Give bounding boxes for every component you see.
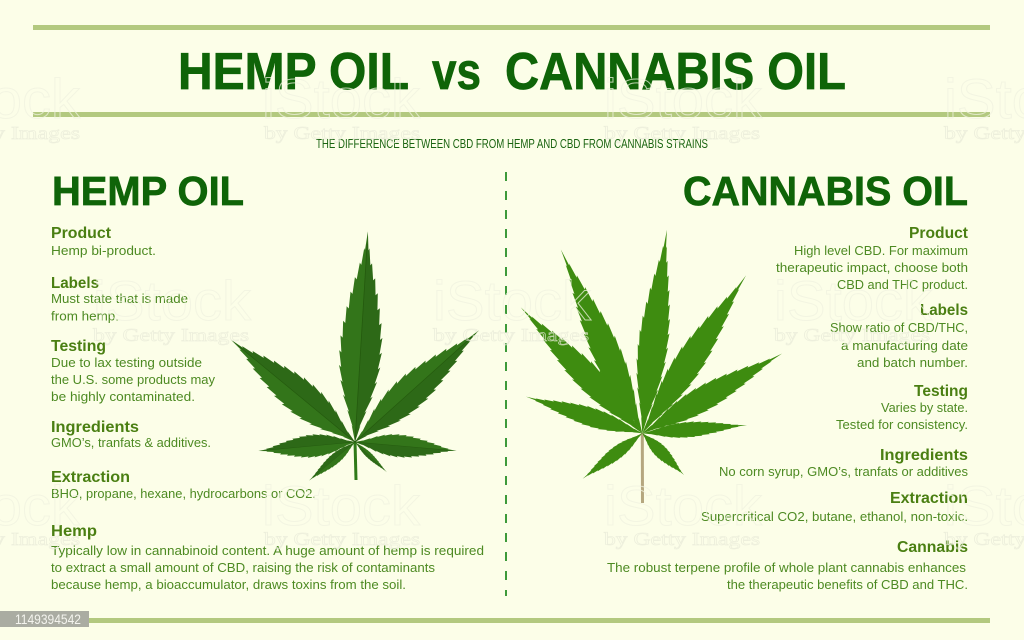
watermark overlay: by Getty Images: [264, 529, 420, 549]
hemp testing: be highly contaminated.: [51, 389, 195, 404]
cannabis ingredients: No corn syrup, GMO’s, tranfats or additives: [719, 464, 968, 479]
cannabis ingredients: [719, 447, 968, 479]
title: vs: [432, 43, 481, 101]
hemp summary: [51, 523, 484, 592]
hemp summary: to extract a small amount of CBD, raising the risk of contaminants: [51, 560, 435, 575]
cannabis labels: Show ratio of CBD/THC,: [830, 320, 968, 335]
hemp labels: Must state that is made: [51, 291, 188, 306]
hemp testing: [51, 338, 215, 404]
title: [178, 43, 846, 101]
watermark overlay: by Getty Images: [604, 529, 760, 549]
cannabis product: therapeutic impact, choose both: [776, 260, 968, 275]
cannabis testing: Testing: [914, 383, 968, 400]
cannabis labels: a manufacturing date: [841, 338, 968, 353]
cannabis product: [776, 225, 969, 292]
cannabis extraction: Supercritical CO2, butane, ethanol, non-toxic.: [701, 509, 968, 524]
icon: cannabis leaf: [511, 228, 788, 503]
cannabis summary: [607, 539, 968, 592]
title: CANNABIS OIL: [505, 43, 846, 101]
hemp testing: the U.S. some products may: [51, 372, 215, 387]
hemp extraction: [51, 469, 316, 501]
cannabis extraction: Extraction: [890, 490, 968, 507]
watermark overlay: by Getty Images: [264, 123, 420, 143]
hemp labels: Labels: [51, 275, 99, 292]
icon: hemp leaf: [220, 230, 491, 485]
watermark overlay: iStock: [604, 474, 763, 537]
title: HEMP OIL: [178, 43, 409, 101]
watermark overlay: iStock: [262, 474, 421, 537]
bottom rule: [33, 618, 990, 623]
watermark overlay: [0, 67, 1024, 549]
hemp summary: because hemp, a bioaccumulator, draws toxins from the soil.: [51, 577, 406, 592]
watermark overlay: by Getty Images: [774, 325, 930, 345]
watermark overlay: by Getty Images: [93, 325, 249, 345]
hemp extraction: BHO, propane, hexane, hydrocarbons or CO2.: [51, 486, 316, 501]
cannabis extraction: [701, 490, 968, 524]
hemp testing: Due to lax testing outside: [51, 355, 202, 370]
title underline rule: [33, 112, 990, 117]
cannabis summary: the therapeutic benefits of CBD and THC.: [727, 577, 968, 592]
image id tag: 1149394542: [15, 612, 81, 627]
subtitle: THE DIFFERENCE BETWEEN CBD FROM HEMP AND CBD FROM CANNABIS STRAINS: [316, 136, 708, 151]
watermark overlay: iStock: [604, 67, 763, 130]
cannabis summary: The robust terpene profile of whole plant cannabis enhances: [607, 560, 967, 575]
hemp product: Hemp bi-product.: [51, 243, 156, 258]
hemp ingredients: GMO’s, tranfats & additives.: [51, 435, 211, 450]
hemp summary: Hemp: [51, 523, 97, 540]
heading: hemp oil: HEMP OIL: [52, 168, 244, 214]
watermark overlay: by Getty Images: [433, 325, 589, 345]
panel: cannabis oil: [607, 168, 969, 592]
cannabis testing: Tested for consistency.: [836, 417, 968, 432]
watermark overlay: iStock: [774, 269, 933, 332]
top rule: [33, 25, 990, 30]
hemp summary: Typically low in cannabinoid content. A huge amount of hemp is required: [51, 543, 484, 558]
cannabis product: Product: [909, 225, 969, 242]
watermark overlay: by Getty Images: [604, 123, 760, 143]
cannabis labels: and batch number.: [857, 355, 968, 370]
hemp testing: Testing: [51, 338, 106, 355]
hemp product: Product: [51, 225, 112, 242]
cannabis ingredients: Ingredients: [880, 447, 968, 464]
hemp labels: [51, 275, 188, 324]
hemp extraction: Extraction: [51, 469, 130, 486]
hemp labels: from hemp.: [51, 308, 119, 324]
watermark overlay: iStock: [93, 269, 252, 332]
panel: hemp oil: [51, 168, 484, 592]
hemp ingredients: Ingredients: [51, 419, 139, 436]
watermark overlay: iStock: [433, 269, 592, 332]
cannabis product: CBD and THC product.: [837, 277, 968, 292]
cannabis labels: [830, 302, 968, 370]
watermark overlay: iStock: [262, 67, 421, 130]
cannabis product: High level CBD. For maximum: [794, 243, 968, 258]
cannabis testing: Varies by state.: [881, 400, 968, 415]
hemp product: [51, 225, 156, 258]
cannabis testing: [836, 383, 968, 432]
center dashed divider: [505, 172, 507, 596]
heading: cannabis oil: CANNABIS OIL: [683, 168, 968, 214]
cannabis labels: Labels: [920, 302, 968, 319]
cannabis summary: Cannabis: [897, 539, 968, 556]
hemp ingredients: [51, 419, 211, 450]
